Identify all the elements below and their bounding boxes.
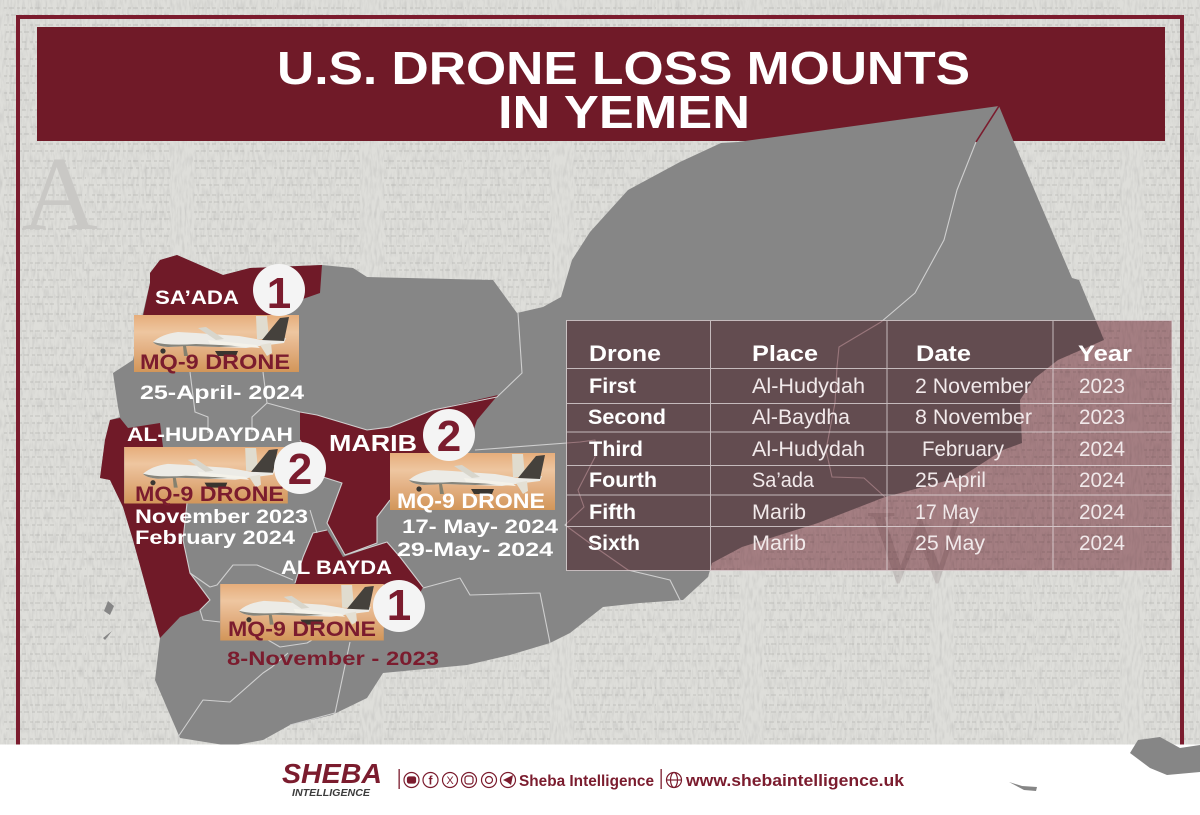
social icons: f <box>428 774 434 788</box>
callout: Al Bayda: 8-November - 2023 <box>227 649 439 670</box>
table row: first <box>589 375 1125 398</box>
islands <box>103 601 114 640</box>
table row: first: 2023 <box>1079 375 1125 398</box>
table row: second <box>588 406 1125 429</box>
map base <box>100 106 1104 746</box>
table row: first: First <box>589 375 636 398</box>
table row: third: Third <box>589 438 643 461</box>
title text: IN YEMEN <box>498 86 750 138</box>
callout: Sa'ada: SA’ADA <box>155 288 239 309</box>
table row: first: Al-Hudydah <box>752 375 865 398</box>
callout: Al-Hudaydah: MQ-9 DRONE <box>135 483 284 506</box>
callout: Al Bayda: AL BAYDA <box>281 558 392 579</box>
callout: Marib: 2 <box>437 412 461 461</box>
table row: fifth: Marib <box>752 501 806 524</box>
table row: second: Second <box>588 406 666 429</box>
table row: fourth <box>589 469 1125 492</box>
table header <box>589 341 1133 366</box>
drone photo: Sa'ada <box>134 315 299 372</box>
logo: INTELLIGENCE <box>292 787 371 799</box>
table row: sixth: Marib <box>752 532 806 555</box>
social icons: X <box>446 775 454 787</box>
table header: Year <box>1078 341 1133 366</box>
drone photo: Marib <box>390 453 555 510</box>
table row: fourth: Fourth <box>589 469 657 492</box>
callout: Sa'ada: 1 <box>267 269 291 318</box>
table header: Place <box>752 341 818 366</box>
footer <box>0 737 1200 815</box>
icon: globe <box>666 772 682 788</box>
table row: fourth: 2024 <box>1079 469 1125 492</box>
table panel <box>566 320 1172 571</box>
region: Al-Hudaydah <box>100 418 210 638</box>
table row: third: 2024 <box>1079 438 1125 461</box>
table row: fourth: Sa’ada <box>752 469 814 492</box>
callout: Al Bayda <box>220 558 439 670</box>
callout: Al-Hudaydah: 2 <box>288 445 312 494</box>
callout: Al Bayda: MQ-9 DRONE <box>228 618 376 641</box>
table header: Date <box>916 341 971 366</box>
callout: Al Bayda: 1 <box>387 581 411 630</box>
region borders <box>178 106 999 737</box>
table row: fifth: Fifth <box>589 501 636 524</box>
table row: sixth: 25 May <box>915 532 985 555</box>
Socotra island <box>1009 737 1200 791</box>
drone photo: Al Bayda <box>220 584 384 640</box>
callout: Al-Hudaydah: November 2023 <box>135 507 308 528</box>
callout: Marib: 17- May- 2024 <box>402 517 559 538</box>
callout: Al-Hudaydah <box>124 425 326 549</box>
title text <box>277 42 970 138</box>
table row: sixth: Sixth <box>588 532 640 555</box>
table row: second: 8 November <box>915 406 1032 429</box>
social icons <box>404 772 516 788</box>
callout: Marib: 29-May- 2024 <box>397 540 554 561</box>
table row: fifth: 2024 <box>1079 501 1125 524</box>
callout: Al-Hudaydah: AL-HUDAYDAH <box>127 425 293 446</box>
table row: first: 2 November <box>915 375 1031 398</box>
table header: Drone <box>589 341 661 366</box>
callout: Marib: MARIB <box>329 430 417 456</box>
region: Al Bayda <box>295 530 423 607</box>
decorative letter W: W <box>868 488 967 605</box>
region: Marib <box>300 395 498 555</box>
region: Sa'ada <box>143 255 322 316</box>
decorative letter A: A <box>22 135 98 252</box>
table row: fifth: 17 May <box>915 501 979 524</box>
table row: fourth: 25 April <box>915 469 986 492</box>
table row: sixth: 2024 <box>1079 532 1125 555</box>
website: www.shebaintelligence.uk <box>685 771 905 790</box>
table row: sixth <box>588 532 1125 555</box>
table row: second: Al-Baydha <box>752 406 850 429</box>
callout: Sa'ada <box>134 264 305 404</box>
title text: U.S. DRONE LOSS MOUNTS <box>277 42 970 94</box>
callout: Sa'ada: 25-April- 2024 <box>140 383 305 404</box>
map of Yemen <box>100 106 1104 746</box>
callout: Sa'ada: MQ-9 DRONE <box>140 351 290 374</box>
table row: second: 2023 <box>1079 406 1125 429</box>
title banner <box>37 27 1165 141</box>
table row: third: February <box>922 438 1004 461</box>
table row: third <box>589 438 1125 461</box>
callout: Marib: MQ-9 DRONE <box>397 490 545 513</box>
table row: fifth <box>589 501 1125 524</box>
logo: SHEBA <box>282 758 382 789</box>
social handle: Sheba Intelligence <box>519 773 654 790</box>
callout: Al-Hudaydah: February 2024 <box>135 528 296 549</box>
table row: third: Al-Hudydah <box>752 438 865 461</box>
drone photo: Al-Hudaydah <box>124 447 288 504</box>
callout: Marib <box>329 409 559 561</box>
